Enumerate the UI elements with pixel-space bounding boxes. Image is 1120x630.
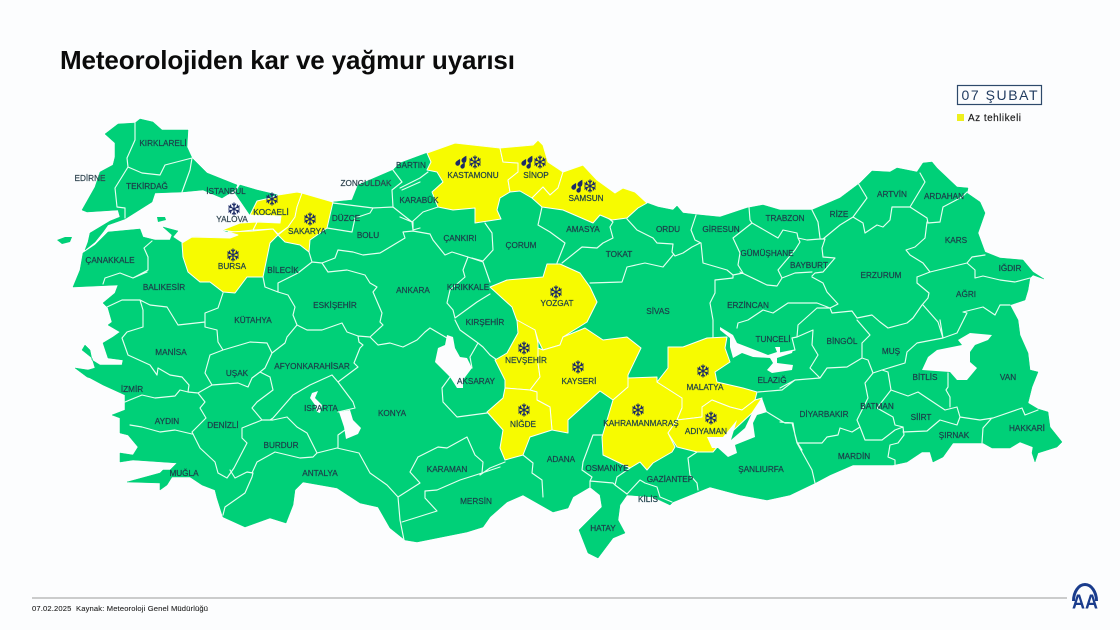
province labels: SİİRT [911, 412, 931, 422]
icon: snow Kastamonu [470, 156, 480, 168]
province: Kahramanmaraş [602, 377, 682, 470]
icon: rain Samsun [571, 179, 584, 193]
icon: snow Sinop [535, 156, 545, 168]
province labels: BURDUR [263, 441, 299, 450]
province labels: KİLİS [638, 494, 659, 504]
province labels: KASTAMONU [447, 171, 499, 180]
province labels: DİYARBAKIR [800, 409, 849, 419]
province labels: ÇORUM [506, 241, 537, 250]
icon: snow Kocaeli [267, 193, 277, 205]
province labels: KONYA [378, 409, 407, 418]
icon: snow Malatya [698, 365, 708, 377]
map of Turkey [57, 119, 1062, 558]
province labels: YALOVA [216, 215, 248, 224]
icon: snow Kahramanmaraş [633, 404, 643, 416]
province labels: ARDAHAN [924, 192, 964, 201]
lake: Eğirdir [310, 391, 322, 413]
province: Kocaeli [250, 192, 302, 234]
province labels: KAHRAMANMARAŞ [603, 419, 679, 428]
province labels: DÜZCE [332, 213, 361, 223]
province labels: ARTVİN [877, 189, 907, 199]
icon: snow Kayseri [573, 361, 583, 373]
province labels: ADIYAMAN [685, 427, 727, 436]
date box: 07 ŞUBAT [962, 87, 1038, 103]
province labels: BAYBURT [790, 261, 828, 270]
province labels: ESKİŞEHİR [313, 300, 357, 310]
province labels: HAKKARİ [1009, 423, 1045, 433]
province labels: GÜMÜŞHANE [740, 248, 794, 258]
province labels: ŞIRNAK [939, 431, 970, 440]
province: Niğde [487, 388, 552, 460]
province labels: ISPARTA [304, 404, 338, 413]
province: Bursa [182, 229, 278, 293]
icon: snow Yalova [229, 203, 239, 215]
province labels: KARS [945, 236, 968, 245]
province labels: DENİZLİ [207, 420, 239, 430]
province labels: AYDIN [155, 417, 179, 426]
province labels: KIRKLARELİ [139, 138, 187, 148]
province: Nevşehir [495, 320, 540, 390]
province labels: BARTIN [396, 161, 426, 170]
province labels: RİZE [830, 209, 849, 219]
province borders [103, 123, 1038, 540]
province labels: TRABZON [765, 214, 805, 223]
land: Thrace [82, 119, 237, 250]
footer source: 07.02.2025 Kaynak: Meteoroloji Genel Müdürlüğü [32, 604, 208, 613]
province labels: KAYSERİ [562, 376, 596, 386]
province labels: AFYONKARAHİSAR [274, 361, 350, 371]
icon: snow Samsun [585, 180, 595, 192]
province labels: BATMAN [860, 402, 894, 411]
icon: snow Niğde [519, 404, 529, 416]
icon: snow Nevşehir [519, 342, 529, 354]
province labels: İSTANBUL [206, 186, 246, 196]
icon: snow Sakarya [305, 213, 315, 225]
province labels: OSMANİYE [585, 463, 629, 473]
province labels: AMASYA [566, 225, 600, 234]
province: Sinop [500, 140, 563, 198]
province labels: ŞANLIURFA [738, 465, 784, 474]
province labels: AKSARAY [457, 377, 496, 386]
province labels: ORDU [656, 225, 680, 234]
province: Kastamonu [427, 143, 518, 223]
province labels: GİRESUN [702, 224, 740, 234]
province labels: SİNOP [523, 170, 549, 180]
province labels: BİLECİK [267, 265, 299, 275]
title: Meteorolojiden kar ve yağmur uyarısı [60, 45, 515, 75]
logo: AA [1072, 584, 1098, 614]
lake: Tuz [435, 335, 472, 388]
province labels: MERSİN [460, 496, 492, 506]
lake: Keban [720, 327, 793, 373]
province labels: KIRŞEHİR [466, 317, 504, 327]
province labels: NİĞDE [510, 419, 536, 429]
province: Yalova [222, 222, 257, 232]
province labels: İZMİR [121, 384, 143, 394]
province labels: KIRIKKALE [447, 283, 490, 292]
province labels: VAN [1000, 373, 1016, 382]
province: Sakarya [278, 193, 333, 252]
province labels: ÇANAKKALE [85, 256, 135, 265]
province labels: ANTALYA [302, 469, 338, 478]
province: Malatya [657, 337, 757, 420]
province labels: BOLU [357, 231, 379, 240]
land: Anatolia [73, 140, 1062, 558]
province: Kayseri [530, 328, 641, 433]
province labels: MUŞ [882, 347, 901, 356]
icon: snow Yozgat [551, 286, 561, 298]
province labels: TOKAT [606, 250, 632, 259]
province labels: ELAZIĞ [757, 375, 787, 385]
island: Marmara [157, 217, 166, 222]
lake: Van [922, 333, 992, 380]
icon: rain Sinop [521, 155, 534, 169]
province labels: ZONGULDAK [341, 179, 392, 188]
province labels: IĞDIR [999, 263, 1021, 273]
province labels: BALIKESİR [143, 282, 185, 292]
province: Yozgat [490, 264, 597, 350]
province labels: MALATYA [686, 383, 724, 392]
icon: snow Bursa [228, 249, 238, 261]
province labels: MUĞLA [169, 468, 199, 478]
province: Samsun [532, 165, 647, 223]
logo: AA: AA [1072, 592, 1098, 614]
province labels: YOZGAT [540, 299, 574, 308]
yellow provinces [182, 140, 762, 470]
province labels: SAKARYA [288, 227, 326, 236]
province labels: KÜTAHYA [234, 315, 272, 325]
province labels: SİVAS [646, 306, 670, 316]
icon: snow Adıyaman [706, 412, 716, 424]
province labels: MARDİN [838, 451, 870, 461]
province labels: ERZİNCAN [727, 300, 769, 310]
province labels: ANKARA [396, 286, 430, 295]
province labels: TEKİRDAĞ [126, 181, 168, 191]
province labels: ADANA [547, 455, 576, 464]
lake: Atatürk Dam [707, 398, 767, 457]
lake: Beyşehir [339, 410, 361, 439]
province labels: BİTLİS [912, 372, 938, 382]
icon: rain Kastamonu [455, 155, 468, 169]
province labels: ERZURUM [861, 271, 902, 280]
province labels: NEVŞEHİR [505, 355, 547, 365]
province labels: TUNCELİ [755, 334, 791, 344]
province labels: AĞRI [956, 289, 976, 299]
province: Adıyaman [668, 398, 762, 452]
province labels: ÇANKIRI [443, 234, 477, 243]
province labels: KARAMAN [427, 465, 467, 474]
island: Gökçeada [57, 237, 72, 244]
province labels: BİNGÖL [827, 336, 858, 346]
footer rule [32, 597, 1067, 599]
province labels [75, 138, 1045, 533]
province labels: EDİRNE [75, 173, 106, 183]
weather icons [228, 155, 716, 424]
province labels: MANİSA [155, 347, 187, 357]
province labels: KOCAELİ [253, 207, 289, 217]
province labels: KARABÜK [399, 195, 439, 205]
province labels: HATAY [590, 524, 616, 533]
province labels: SAMSUN [568, 194, 604, 203]
province labels: GAZİANTEP [647, 474, 694, 484]
province labels: UŞAK [226, 369, 249, 378]
province labels: BURSA [218, 262, 247, 271]
legend: az tehlikeli: Az tehlikeli [968, 113, 1021, 124]
